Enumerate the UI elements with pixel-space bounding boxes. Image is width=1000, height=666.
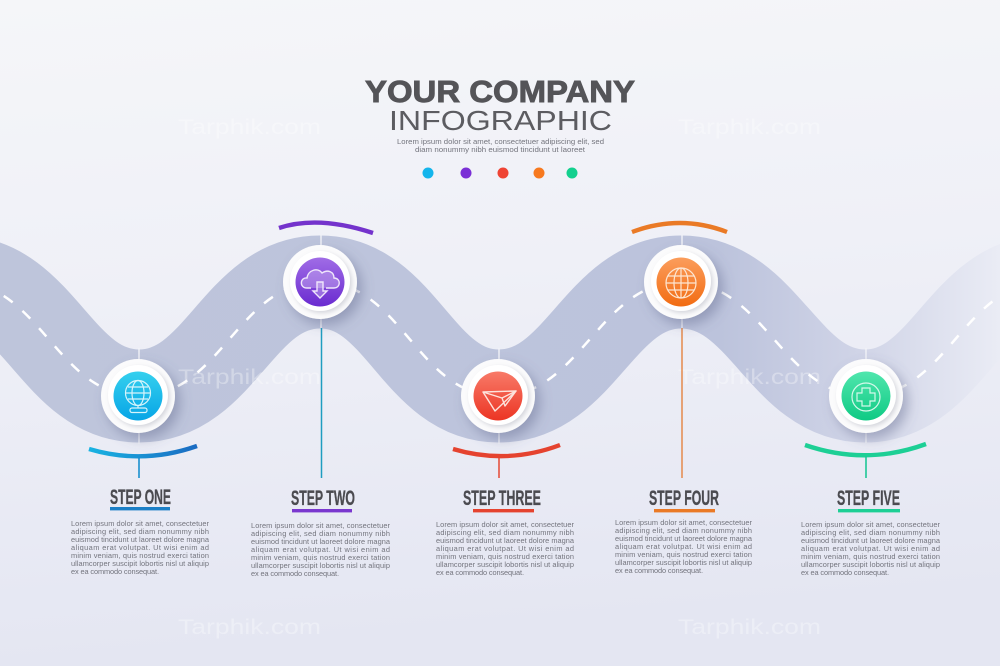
- step four text: Lorem ipsum dolor sit amet, consectetuer: [615, 518, 753, 527]
- step three text: adipiscing elit, sed diam nonummy nibh: [436, 528, 574, 537]
- step five heading: STEP FIVE: [837, 487, 900, 510]
- step four: [615, 223, 753, 575]
- step five text: aliquam erat volutpat. Ut wisi enim ad: [801, 544, 940, 553]
- step five arc and connector: [805, 348, 926, 478]
- icon: desk globe: [126, 380, 150, 412]
- colour dots: [422, 168, 578, 178]
- step three underline: [473, 509, 534, 512]
- step one text: euismod tincidunt ut laoreet dolore magna: [71, 535, 210, 544]
- step four text: ex ea commodo consequat.: [615, 566, 703, 575]
- step four text: ullamcorper suscipit lobortis nisl ut aliquip: [615, 558, 752, 567]
- step one node: [101, 359, 175, 433]
- step five text: Lorem ipsum dolor sit amet, consectetuer: [801, 520, 941, 529]
- step one arc and connector: [89, 348, 197, 478]
- step five node: [829, 359, 903, 433]
- watermarks: Tarphik.com: [178, 116, 321, 139]
- step five: [801, 348, 941, 577]
- subtitle: Lorem ipsum dolor sit amet, consectetuer adipiscing elit, sed: [397, 137, 604, 146]
- step two text: euismod tincidunt ut laoreet dolore magna: [251, 537, 391, 546]
- step three text: ullamcorper suscipit lobortis nisl ut aliquip: [436, 560, 574, 569]
- road ribbon: [0, 282, 1000, 396]
- step one: [71, 348, 210, 576]
- step five text: ex ea commodo consequat.: [801, 568, 889, 577]
- step three heading: STEP THREE: [463, 487, 541, 510]
- title: INFOGRAPHIC: [389, 105, 612, 136]
- step five text: ullamcorper suscipit lobortis nisl ut aliquip: [801, 560, 940, 569]
- step four node: [644, 245, 718, 319]
- step three text: [436, 520, 575, 577]
- step one text: ex ea commodo consequat.: [71, 567, 159, 576]
- icon: cloud download: [301, 270, 339, 298]
- step three: [436, 348, 575, 577]
- step one text: aliquam erat volutpat. Ut wisi enim ad: [71, 543, 209, 552]
- step four text: [615, 518, 753, 575]
- icon: medical cross: [852, 383, 880, 411]
- step two heading: STEP TWO: [291, 487, 355, 510]
- step four text: minim veniam, quis nostrud exerci tation: [615, 550, 752, 559]
- step two text: [251, 521, 391, 578]
- step two text: adipiscing elit, sed diam nonummy nibh: [251, 529, 390, 538]
- step two text: aliquam erat volutpat. Ut wisi enim ad: [251, 545, 390, 554]
- watermarks: Tarphik.com: [678, 116, 821, 139]
- step three arc and connector: [453, 348, 560, 478]
- title: YOUR COMPANY: [365, 74, 635, 109]
- watermarks: [178, 116, 821, 639]
- watermarks: Tarphik.com: [178, 366, 321, 389]
- watermarks: Tarphik.com: [678, 366, 821, 389]
- step four text: aliquam erat volutpat. Ut wisi enim ad: [615, 542, 752, 551]
- step three node: [461, 359, 535, 433]
- step four text: euismod tincidunt ut laoreet dolore magna: [615, 534, 753, 543]
- step two text: ullamcorper suscipit lobortis nisl ut aliquip: [251, 561, 390, 570]
- step three text: aliquam erat volutpat. Ut wisi enim ad: [436, 544, 574, 553]
- step one text: ullamcorper suscipit lobortis nisl ut aliquip: [71, 559, 209, 568]
- step one heading: STEP ONE: [110, 486, 171, 509]
- step one text: minim veniam, quis nostrud exerci tation: [71, 551, 209, 560]
- subtitle: diam nonummy nibh euismod tincidunt ut laoreet: [415, 145, 585, 154]
- step four text: adipiscing elit, sed diam nonummy nibh: [615, 526, 752, 535]
- step one text: Lorem ipsum dolor sit amet, consectetuer: [71, 519, 210, 528]
- subtitle: [397, 137, 604, 154]
- step two text: ex ea commodo consequat.: [251, 569, 339, 578]
- road centre dashes: [0, 282, 1000, 396]
- step five text: euismod tincidunt ut laoreet dolore magna: [801, 536, 941, 545]
- step four underline: [654, 509, 715, 512]
- step three text: euismod tincidunt ut laoreet dolore magna: [436, 536, 575, 545]
- step three text: minim veniam, quis nostrud exerci tation: [436, 552, 574, 561]
- step five text: [801, 520, 941, 577]
- icon: paper plane: [483, 391, 516, 411]
- step five text: adipiscing elit, sed diam nonummy nibh: [801, 528, 940, 537]
- title: [365, 74, 635, 136]
- step two text: minim veniam, quis nostrud exerci tation: [251, 553, 390, 562]
- step four arc and connector: [632, 223, 727, 478]
- step two arc and connector: [279, 223, 373, 478]
- step two node: [283, 245, 357, 319]
- watermarks: Tarphik.com: [678, 616, 821, 639]
- step three text: Lorem ipsum dolor sit amet, consectetuer: [436, 520, 575, 529]
- watermarks: Tarphik.com: [178, 616, 321, 639]
- step four heading: STEP FOUR: [649, 487, 719, 510]
- step five text: minim veniam, quis nostrud exerci tation: [801, 552, 940, 561]
- icon: globe: [666, 268, 696, 298]
- step one underline: [110, 507, 170, 510]
- step two: [251, 223, 391, 578]
- step one text: adipiscing elit, sed diam nonummy nibh: [71, 527, 209, 536]
- step five underline: [838, 509, 900, 512]
- step two underline: [292, 509, 352, 512]
- step two text: Lorem ipsum dolor sit amet, consectetuer: [251, 521, 391, 530]
- step one text: [71, 519, 210, 576]
- step three text: ex ea commodo consequat.: [436, 568, 524, 577]
